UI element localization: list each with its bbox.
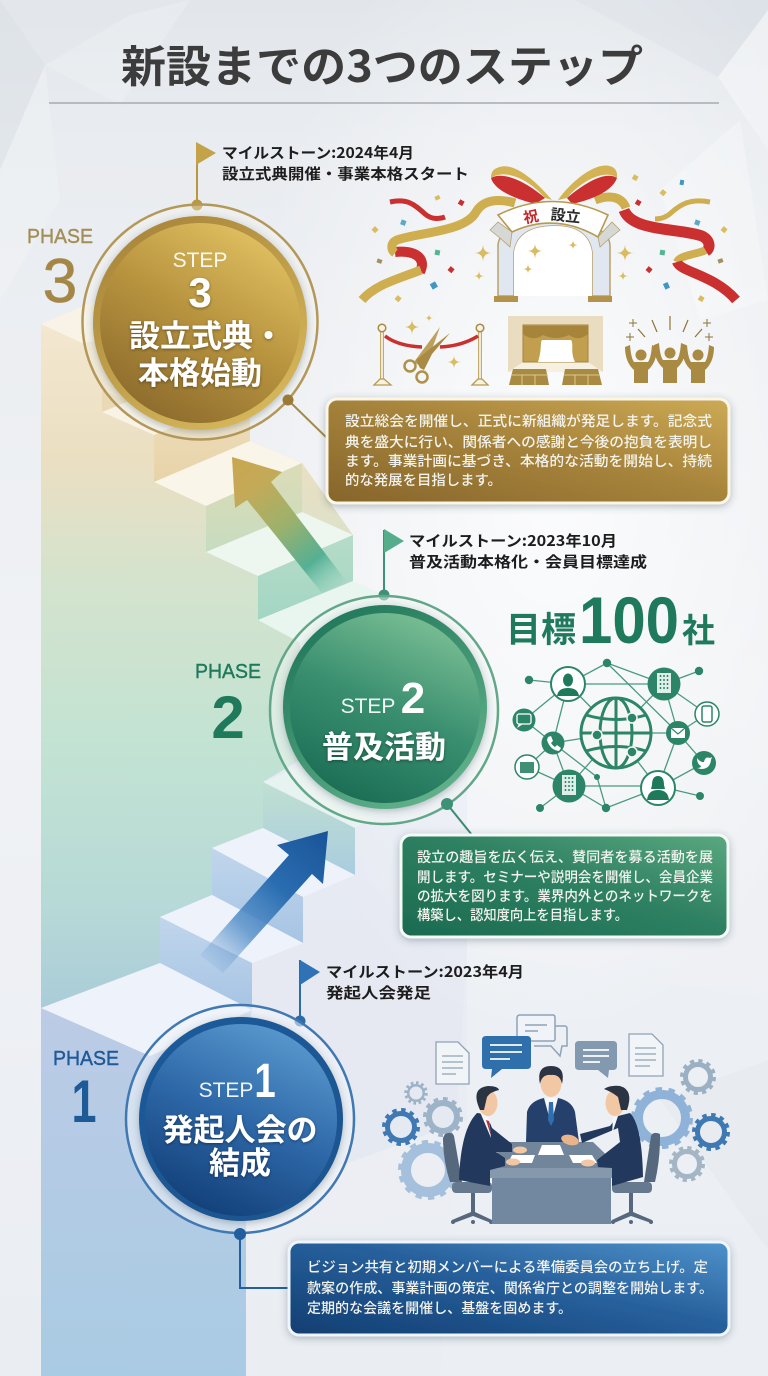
icon: globe bbox=[581, 698, 651, 768]
step 3 circle: 設立式典・ bbox=[129, 311, 284, 356]
phase 3 label bbox=[27, 226, 93, 316]
title: 新設までの3つのステップ bbox=[121, 31, 643, 95]
step 1 circle: STEP bbox=[199, 1079, 253, 1102]
arrow: step 1 to step 2 bbox=[200, 831, 328, 973]
step 1 circle bbox=[126, 1005, 354, 1233]
callout 3: 典を盛大に行い、関係者への感謝と今後の抱負を表明し bbox=[345, 431, 712, 452]
illustration: meeting bbox=[384, 1015, 728, 1224]
milestone 3 text: 設立式典開催・事業本格スタート bbox=[222, 163, 469, 184]
panel: step 1 bbox=[53, 960, 729, 1335]
banner: 祝 bbox=[521, 205, 540, 228]
target 100 companies: 目標 bbox=[506, 602, 576, 653]
target 100 companies: 社 bbox=[682, 604, 715, 652]
phase 1 label: 1 bbox=[71, 1069, 97, 1136]
arch bbox=[494, 222, 612, 302]
callout 2: 構築し、認知度向上を目指します。 bbox=[417, 904, 628, 925]
callout 2: 開します。セミナーや説明会を開催し、会員企業 bbox=[417, 866, 713, 887]
banner: 設立 bbox=[550, 204, 582, 228]
icon: bird bbox=[692, 751, 716, 775]
step 1 circle: 発起人会の bbox=[162, 1105, 318, 1150]
icon: theatre bbox=[508, 316, 603, 385]
callout 2 bbox=[401, 835, 728, 937]
table bbox=[483, 1142, 620, 1224]
step 2 circle: 普及活動 bbox=[322, 722, 446, 767]
ribbons and bow bbox=[362, 166, 736, 300]
milestone 2 text: マイルストーン:2023年10月 bbox=[409, 530, 617, 551]
callout 3: ます。事業計画に基づき、本格的な活動を開始し、持続 bbox=[345, 450, 713, 471]
callout 2: の拡大を図ります。業界内外とのネットワークを bbox=[417, 885, 713, 906]
icon: document folder bbox=[515, 755, 539, 779]
network diagram bbox=[512, 659, 719, 812]
step 3 circle: 3 bbox=[188, 269, 212, 316]
icon: person bbox=[551, 667, 585, 701]
icon: office building bbox=[552, 770, 586, 802]
phase 2 label: PHASE bbox=[195, 661, 261, 683]
step 1 circle: 1 bbox=[254, 1055, 276, 1108]
speech bubbles bbox=[482, 1015, 617, 1078]
person: right bbox=[533, 1086, 643, 1186]
icon: building bbox=[648, 668, 680, 700]
connector 2 bbox=[441, 798, 472, 835]
illustration: ceremony bbox=[362, 166, 736, 385]
milestone flag 2 bbox=[378, 529, 404, 600]
person: center bbox=[526, 1066, 579, 1142]
callout 3 bbox=[327, 399, 729, 503]
panel: step 2 bbox=[195, 529, 728, 937]
icon: chat bbox=[512, 708, 536, 732]
milestone 1 text bbox=[326, 961, 524, 1003]
person: left bbox=[459, 1086, 527, 1186]
callout 1 bbox=[289, 1242, 729, 1335]
step 3 circle bbox=[82, 204, 318, 440]
step 2 circle: 2 bbox=[401, 674, 425, 723]
chairs bbox=[443, 1133, 660, 1224]
icon: cheering crowd bbox=[625, 316, 714, 383]
documents bbox=[436, 1034, 663, 1084]
callout 2: 設立の趣旨を広く伝え、賛同者を募る活動を展 bbox=[417, 846, 713, 867]
panel: step 3 bbox=[27, 142, 736, 503]
phase 2 label: 2 bbox=[211, 684, 245, 751]
icon: smartphone bbox=[695, 702, 719, 726]
milestone 2 text: 普及活動本格化・会員目標達成 bbox=[409, 551, 647, 572]
step 2 circle bbox=[270, 596, 498, 824]
milestone flag 1 bbox=[294, 960, 320, 1026]
icon: mail bbox=[666, 721, 690, 745]
milestone 3 text bbox=[222, 142, 469, 184]
step 2 circle: STEP bbox=[341, 695, 395, 718]
icon: ribbon cutting bbox=[374, 314, 488, 385]
callout 1: 款案の作成、事業計画の策定、関係省庁との調整を開始します。 bbox=[307, 1277, 713, 1298]
arrow: step 2 to step 3 bbox=[232, 457, 347, 593]
phase 1 label bbox=[53, 1048, 119, 1136]
target 100 companies bbox=[506, 583, 715, 657]
callout 3: 的な発展を目指します。 bbox=[345, 469, 502, 490]
callout 3: 設立総会を開催し、正式に新組織が発足します。記念式 bbox=[345, 410, 712, 431]
phase 3 label: PHASE bbox=[27, 226, 93, 248]
phase 2 label bbox=[195, 661, 261, 751]
target 100 companies: 100 bbox=[579, 583, 679, 657]
gears bbox=[384, 1061, 728, 1198]
connector 3 bbox=[282, 394, 330, 441]
milestone 1 text: マイルストーン:2023年4月 bbox=[326, 961, 524, 982]
sparkles and confetti bbox=[371, 174, 728, 302]
callout 1: 定期的な会議を開催し、基盤を固めます。 bbox=[307, 1297, 572, 1318]
staircase bbox=[41, 298, 405, 1376]
connector 1 bbox=[234, 1228, 290, 1288]
milestone 2 text bbox=[409, 530, 647, 572]
phase 1 label: PHASE bbox=[53, 1048, 119, 1070]
callout 1: ビジョン共有と初期メンバーによる準備委員会の立ち上げ。定 bbox=[307, 1256, 708, 1277]
step 1 circle: 結成 bbox=[209, 1138, 271, 1183]
step 3 circle: STEP bbox=[173, 249, 227, 272]
step 3 circle: 本格始動 bbox=[138, 348, 262, 393]
icon: businesswoman bbox=[641, 771, 675, 805]
banner bbox=[490, 202, 620, 247]
phase 3 label: 3 bbox=[43, 247, 77, 316]
milestone 3 text: マイルストーン:2024年4月 bbox=[222, 142, 414, 163]
icon: phone bbox=[542, 732, 564, 754]
milestone 1 text: 発起人会発足 bbox=[326, 982, 431, 1003]
milestone flag 3 bbox=[192, 142, 216, 210]
